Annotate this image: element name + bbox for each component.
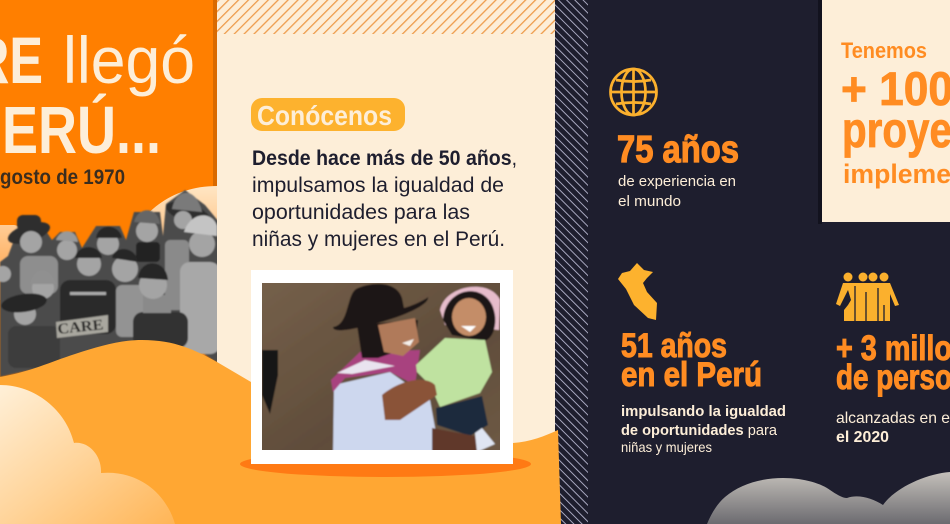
stat: 51 años en el Perú: 51 años: [621, 327, 727, 365]
striped divider: [555, 0, 588, 524]
intro text: oportunidades para las: [252, 201, 470, 224]
child hair: [443, 291, 495, 341]
mother hair and face: [357, 320, 418, 358]
stat: 3 millones de personas: [836, 272, 950, 446]
stat: 75 años: [610, 69, 739, 210]
panel: orange history: [0, 0, 217, 400]
icon: people: [836, 272, 899, 321]
icon: globe: [610, 69, 656, 115]
faces: [0, 211, 215, 325]
hair and caps: [0, 210, 217, 315]
panel: dark stats: [588, 0, 950, 524]
hands: [382, 380, 437, 420]
photo shadow: [240, 451, 531, 477]
heading: CARE llegó al Perú: [0, 23, 195, 168]
child sweater: [416, 338, 492, 407]
orange wave ground: [0, 340, 561, 524]
card: projects: Tenemos: [841, 38, 927, 63]
stat: 75 años: de experiencia en: [618, 173, 736, 190]
hat right: [163, 193, 213, 229]
left cloud: [0, 385, 175, 524]
mother shirt: [333, 372, 440, 455]
tag: Conócenos: Conócenos: [257, 100, 392, 131]
panel: cream intro: [217, 0, 555, 450]
cuff: [475, 428, 495, 452]
stat: 51 años en el Perú: impulsando la igualdad: [621, 403, 786, 420]
hat: [333, 284, 428, 330]
heading: CARE llegó al Perú: ERÚ...: [2, 93, 161, 168]
stat: 51 años en el Perú: niñas y mujeres: [621, 439, 712, 455]
intro text: impulsamos la igualdad de: [252, 174, 504, 197]
smile: [402, 339, 414, 346]
photo: children with CARE sign: [0, 190, 220, 377]
child face: [452, 298, 486, 336]
stat: 51 años en el Perú: [618, 263, 786, 455]
card: projects: impleme: [843, 159, 950, 189]
icon: map of Peru: [618, 263, 657, 320]
scarf: [331, 350, 420, 392]
stat: 3 millones de personas: el 2020: [836, 429, 889, 446]
clothes: [8, 240, 220, 368]
dark cloud: [707, 472, 950, 524]
stat: 51 años en el Perú: de oportunidades para: [621, 422, 778, 439]
card: projects: [818, 0, 950, 224]
hatch strip: [217, 0, 555, 34]
hat left: [5, 215, 53, 248]
child flower hat: [440, 287, 500, 330]
date: gosto de 1970: [0, 166, 125, 189]
stat: 75 años: el mundo: [618, 193, 681, 210]
intro text: Desde hace más de 50 años,: [252, 147, 517, 170]
stat: 51 años en el Perú: en el Perú: [621, 356, 762, 394]
stat: 75 años: 75 años: [617, 129, 739, 171]
heading: CARE llegó al Perú: llegó: [63, 23, 195, 97]
child jeans: [436, 396, 488, 436]
stat: 3 millones de personas: alcanzadas en e: [836, 410, 950, 427]
intro text: [252, 147, 517, 251]
photo frame: mother and child: [251, 270, 513, 464]
dark niche: [262, 350, 278, 414]
background cloud behind children: [0, 186, 217, 300]
intro text: niñas y mujeres en el Perú.: [252, 228, 505, 251]
CARE sign: CARE: [57, 317, 104, 338]
